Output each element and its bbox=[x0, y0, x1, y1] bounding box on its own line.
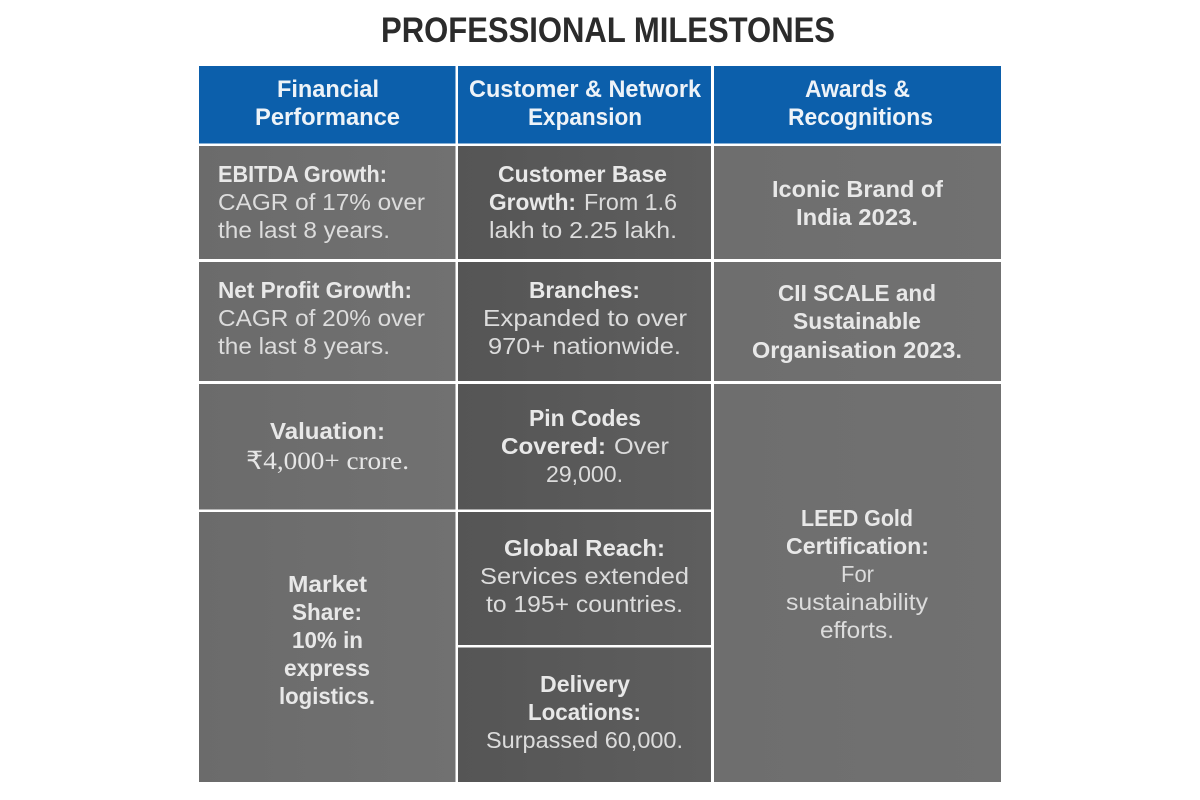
panel: Pin Codes Covered: Pin Codes bbox=[529, 405, 641, 431]
panel: Net Profit Growth: Net Profit Growth: bbox=[218, 277, 412, 303]
panel: Market Share: express bbox=[284, 655, 370, 681]
panel: CII SCALE and Sustainable Organisation bbox=[714, 262, 1001, 381]
panel: EBITDA Growth: CAGR of 17% over bbox=[218, 189, 425, 215]
panel: header Awards and Recognitions: Recognitions bbox=[788, 104, 933, 131]
panel: Net Profit Growth: CAGR of 20% over bbox=[218, 305, 425, 331]
panel: Branches bbox=[458, 262, 711, 381]
panel: header Awards and Recognitions: Awards & bbox=[805, 76, 910, 103]
panel: Net Profit Growth bbox=[199, 262, 456, 381]
panel: Branches: Branches: bbox=[529, 277, 640, 303]
panel: Customer Base Growth: From 1.6 bbox=[584, 189, 677, 215]
panel: Iconic Brand of India: India 2023. bbox=[796, 204, 918, 230]
panel: Customer Base Growth: lakh to 2.25 lakh. bbox=[489, 217, 677, 243]
panel: header Financial Performance: Financial bbox=[277, 76, 379, 103]
panel: CII SCALE and Sustainable Organisation: Sustainable bbox=[793, 308, 921, 334]
panel: Delivery Locations: Delivery bbox=[540, 671, 630, 697]
panel: Global Reach: to 195+ countries. bbox=[486, 591, 683, 617]
panel: Pin Codes Covered bbox=[458, 384, 711, 510]
panel: Market Share bbox=[199, 512, 456, 782]
panel: CII SCALE and Sustainable Organisation: Organisation 2023. bbox=[752, 337, 962, 363]
panel: header Customer and Network Expansion bbox=[458, 66, 711, 144]
panel: Valuation bbox=[199, 384, 456, 510]
panel: Delivery Locations: Locations: bbox=[528, 699, 641, 725]
panel: EBITDA Growth bbox=[199, 146, 456, 259]
panel: header Financial Performance bbox=[199, 66, 456, 144]
panel: Delivery Locations bbox=[458, 648, 711, 782]
panel: Branches: Expanded to over bbox=[483, 305, 687, 331]
panel: header Financial Performance: Performance bbox=[255, 104, 400, 131]
panel: Iconic Brand of India bbox=[714, 146, 1001, 259]
panel: LEED Gold Certification: sustainability bbox=[786, 589, 928, 615]
panel: Valuation: Valuation: bbox=[270, 418, 385, 444]
panel: Customer Base Growth bbox=[458, 146, 711, 259]
panel: Market Share: Market bbox=[288, 571, 367, 597]
panel: Customer Base Growth: Customer Base bbox=[498, 161, 667, 187]
panel: Valuation: ₹4,000+ crore. bbox=[246, 448, 409, 475]
panel: Global Reach: Global Reach: bbox=[504, 535, 665, 561]
panel: LEED Gold Certification: efforts. bbox=[820, 617, 894, 643]
panel: Pin Codes Covered: Covered: bbox=[501, 433, 606, 459]
title: PROFESSIONAL MILESTONES bbox=[381, 11, 835, 50]
panel: Market Share: Share: bbox=[292, 599, 362, 625]
panel: LEED Gold Certification bbox=[714, 384, 1001, 782]
panel: Market Share: 10% in bbox=[292, 627, 363, 653]
panel: header Customer and Network Expansion: Expansion bbox=[528, 104, 642, 131]
panel: Global Reach bbox=[458, 512, 711, 645]
panel: Pin Codes Covered: 29,000. bbox=[546, 461, 623, 487]
panel: Pin Codes Covered: Over bbox=[614, 433, 669, 459]
panel: Delivery Locations: Surpassed 60,000. bbox=[486, 727, 683, 753]
panel: CII SCALE and Sustainable Organisation: CII SCALE and bbox=[778, 280, 936, 306]
panel: Iconic Brand of India: Iconic Brand of bbox=[772, 176, 943, 202]
panel: header Customer and Network Expansion: Customer & Network bbox=[469, 76, 702, 103]
panel: LEED Gold Certification: Certification: bbox=[786, 533, 929, 559]
panel: Market Share: logistics. bbox=[279, 683, 375, 709]
panel: Customer Base Growth: Growth: bbox=[489, 189, 576, 215]
panel: EBITDA Growth: EBITDA Growth: bbox=[218, 161, 387, 187]
panel: EBITDA Growth: the last 8 years. bbox=[218, 217, 390, 243]
panel: LEED Gold Certification: LEED Gold bbox=[801, 505, 913, 531]
panel: LEED Gold Certification: For bbox=[841, 561, 874, 587]
panel: Global Reach: Services extended bbox=[480, 563, 689, 589]
panel: header Awards and Recognitions bbox=[714, 66, 1001, 144]
panel: Branches: 970+ nationwide. bbox=[488, 333, 681, 359]
panel: Net Profit Growth: the last 8 years. bbox=[218, 333, 390, 359]
